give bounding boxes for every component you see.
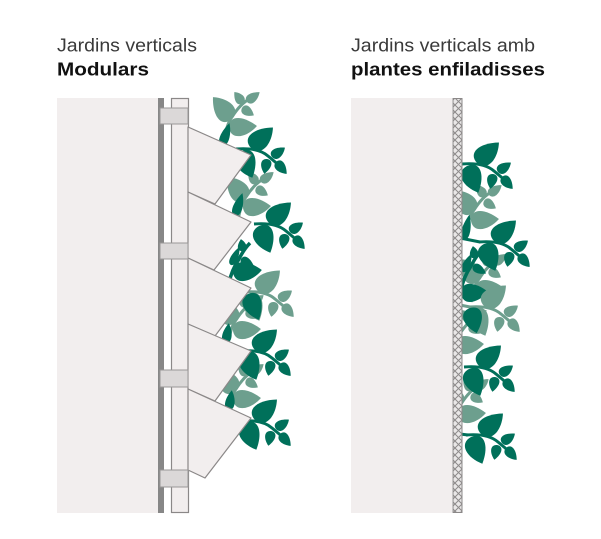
brackets	[160, 108, 188, 487]
panel: trailing plants diagram	[351, 98, 534, 513]
wall	[57, 98, 158, 513]
panel: modular diagram	[57, 88, 309, 513]
support post	[158, 98, 164, 513]
heading: gardens with trailing plants: plantes enfiladisses	[351, 60, 545, 80]
heading: modular gardens	[57, 34, 197, 80]
plants: trailing foliage	[432, 135, 534, 468]
mesh felt layer	[453, 98, 462, 512]
vertical rail	[172, 98, 188, 512]
plants: modular climbing foliage	[205, 88, 309, 454]
heading: modular gardens: Jardins verticals	[57, 34, 197, 56]
heading: gardens with trailing plants	[351, 34, 545, 80]
white gap behind mesh	[452, 98, 453, 513]
heading: modular gardens: Modulars	[57, 60, 149, 80]
wall	[351, 98, 452, 513]
heading: gardens with trailing plants: Jardins verticals amb	[351, 34, 535, 56]
planter modules	[188, 127, 251, 478]
